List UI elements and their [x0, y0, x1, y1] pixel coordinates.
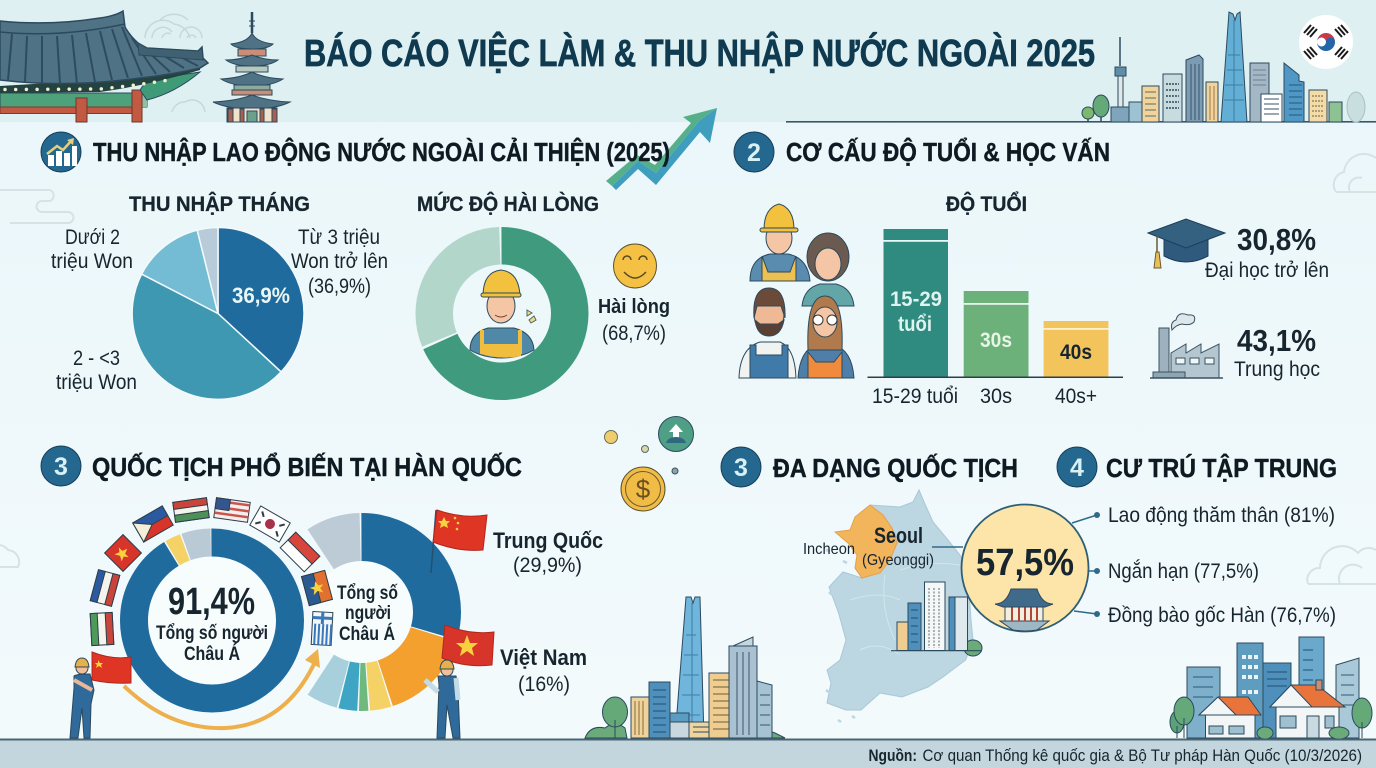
subheading: satisfaction: MỨC ĐỘ HÀI LÒNG — [417, 192, 599, 216]
heading: age and education: CƠ CẤU ĐỘ TUỔI & HỌC VẤN — [786, 137, 1110, 167]
label: total Asians small: Châu Á — [339, 623, 395, 645]
label: Seoul: Seoul — [874, 523, 923, 548]
heading: common nationalities: QUỐC TỊCH PHỔ BIẾN TẠI HÀN QUỐC — [92, 452, 522, 482]
label: 3 million won and above — [291, 226, 388, 298]
icon: factory — [1150, 314, 1223, 378]
panel: common nationalities — [41, 446, 603, 738]
axis labels: 15-29 tuổi — [872, 385, 958, 408]
bar: 40s: 40s — [1060, 341, 1092, 364]
pie chart: monthly income — [132, 228, 304, 399]
pie value label: 36,9% — [232, 283, 290, 308]
callout: 57.5 percent circle — [962, 504, 1088, 632]
map: South Korea — [803, 490, 982, 722]
label: under 2 million won: Dưới 2 — [65, 226, 120, 249]
heading: residence: CƯ TRÚ TẬP TRUNG — [1106, 453, 1337, 483]
decorative icons: coin and upward badge — [604, 416, 694, 511]
bar: 15-29 — [884, 229, 948, 377]
arrow: rising trend — [606, 108, 717, 190]
stat: secondary school: Trung học — [1234, 358, 1320, 381]
label: satisfied share — [598, 296, 670, 345]
label: total Asians small — [337, 583, 398, 645]
icon: smiley — [614, 244, 656, 288]
icon: Vietnam flag — [442, 625, 494, 666]
stat: 91.4 percent: Tổng số người — [156, 623, 268, 644]
callout: 57.5 percent circle: 57,5% — [976, 542, 1074, 584]
illustration: houses and city — [1170, 637, 1372, 739]
label: total Asians small: người — [345, 603, 391, 624]
label: under 2 million won — [51, 226, 133, 273]
donut chart: nationality breakdown — [287, 537, 437, 687]
bar: 40s — [1044, 321, 1108, 377]
title: BÁO CÁO VIỆC LÀM & THU NHẬP NƯỚC NGOÀI 2025 — [304, 31, 1095, 75]
stat: university: 30,8% — [1237, 222, 1316, 257]
heading: diversity: ĐA DẠNG QUỐC TỊCH — [773, 453, 1018, 483]
label: China — [493, 528, 603, 577]
item: ethnic Koreans: Đồng bào gốc Hàn (76,7%) — [1108, 604, 1336, 627]
bar: 15-29: 15-29 — [890, 288, 942, 311]
label: under 2 million won: triệu Won — [51, 250, 133, 273]
illustration: worker with China flag — [70, 652, 131, 738]
donut chart: satisfaction — [434, 246, 570, 381]
badge: number 2 — [734, 132, 774, 172]
stat: university: Đại học trở lên — [1205, 259, 1329, 282]
donut chart: Asian share — [134, 542, 290, 698]
icon: hanok gate — [995, 589, 1053, 631]
label: China: Trung Quốc — [493, 528, 603, 553]
stat: university — [1205, 222, 1329, 282]
subheading: monthly income: THU NHẬP THÁNG — [129, 192, 310, 216]
bar: 15-29: tuổi — [898, 313, 932, 336]
label: satisfied share: Hài lòng — [598, 296, 670, 318]
icon: Korean flag badge — [1299, 15, 1353, 69]
axis labels — [872, 385, 1097, 408]
stat: 91.4 percent: Châu Á — [184, 643, 240, 665]
connector: map to circle — [932, 546, 963, 548]
stat: 91.4 percent — [156, 581, 268, 665]
icon: worker in hard hat — [470, 270, 536, 358]
axis labels: 30s — [980, 385, 1012, 408]
illustration: pagoda — [213, 12, 290, 122]
label: 2 to 3 million won: 2 - <3 — [73, 347, 120, 370]
list: residence by visa type — [1072, 504, 1336, 627]
stat: secondary school: 43,1% — [1237, 323, 1316, 358]
icon: growth chart badge — [41, 132, 81, 172]
decorative icons: coin and upward badge: $ — [636, 474, 651, 504]
illustration: city skyline centre — [585, 597, 785, 738]
badge: number 3 diversity: 3 — [734, 454, 748, 482]
subheading: age: ĐỘ TUỔI — [946, 192, 1027, 216]
badge: number 4 — [1057, 447, 1097, 487]
badge: number 4: 4 — [1070, 454, 1084, 482]
label: Gyeonggi: (Gyeonggi) — [862, 552, 934, 569]
label: satisfied share: (68,7%) — [602, 322, 666, 345]
icon: graduation cap — [1148, 219, 1225, 268]
badge: number 3 — [41, 446, 81, 486]
stat: 91.4 percent: 91,4% — [168, 581, 255, 623]
stat: secondary school — [1234, 323, 1320, 381]
label: Vietnam: (16%) — [518, 673, 570, 696]
label: China: (29,9%) — [513, 554, 582, 577]
label: 2 to 3 million won — [56, 347, 137, 394]
bar chart: age groups — [868, 229, 1123, 408]
label: 2 to 3 million won: triệu Won — [56, 371, 137, 394]
badge: number 3: 3 — [54, 453, 68, 481]
heading: income improvement: THU NHẬP LAO ĐỘNG NƯỚC NGOÀI CẢI THIỆN (2025) — [93, 137, 670, 167]
bar: 30s — [964, 291, 1028, 377]
item: family visit workers: Lao động thăm thân (81%) — [1108, 504, 1335, 527]
icon: China flag large — [431, 510, 487, 573]
illustration: Seoul skyline — [1082, 12, 1365, 122]
item: short term: Ngắn hạn (77,5%) — [1108, 560, 1259, 583]
decorative clouds — [0, 154, 1376, 584]
label: Vietnam — [500, 645, 587, 696]
footer: source — [0, 738, 1376, 768]
axis labels: 40s+ — [1055, 385, 1097, 408]
panel: age and education — [734, 132, 1329, 408]
illustration: worker with Vietnam flag — [425, 660, 460, 738]
city towers on map — [891, 582, 982, 656]
label: Incheon: Incheon — [803, 541, 855, 558]
panel: nationality diversity heading — [721, 447, 1018, 487]
panel: header banner — [0, 0, 1376, 123]
arrow: curved link — [124, 649, 320, 728]
label: 3 million won and above: Từ 3 triệu — [298, 226, 380, 249]
flags ring — [90, 498, 333, 646]
badge: number 3 diversity — [721, 447, 761, 487]
panel: foreign worker income — [41, 108, 717, 399]
label: Vietnam: Việt Nam — [500, 645, 587, 670]
label: 3 million won and above: (36,9%) — [308, 275, 371, 298]
footer: source: Nguồn: — [868, 746, 917, 765]
label: total Asians small: Tổng số — [337, 583, 398, 604]
panel: residence concentration — [803, 447, 1372, 739]
illustration: group of workers — [739, 204, 854, 378]
bar: 30s: 30s — [980, 329, 1012, 352]
badge: number 2: 2 — [747, 139, 761, 167]
label: 3 million won and above: Won trở lên — [291, 250, 388, 273]
illustration: hanok palace roof — [0, 11, 208, 122]
